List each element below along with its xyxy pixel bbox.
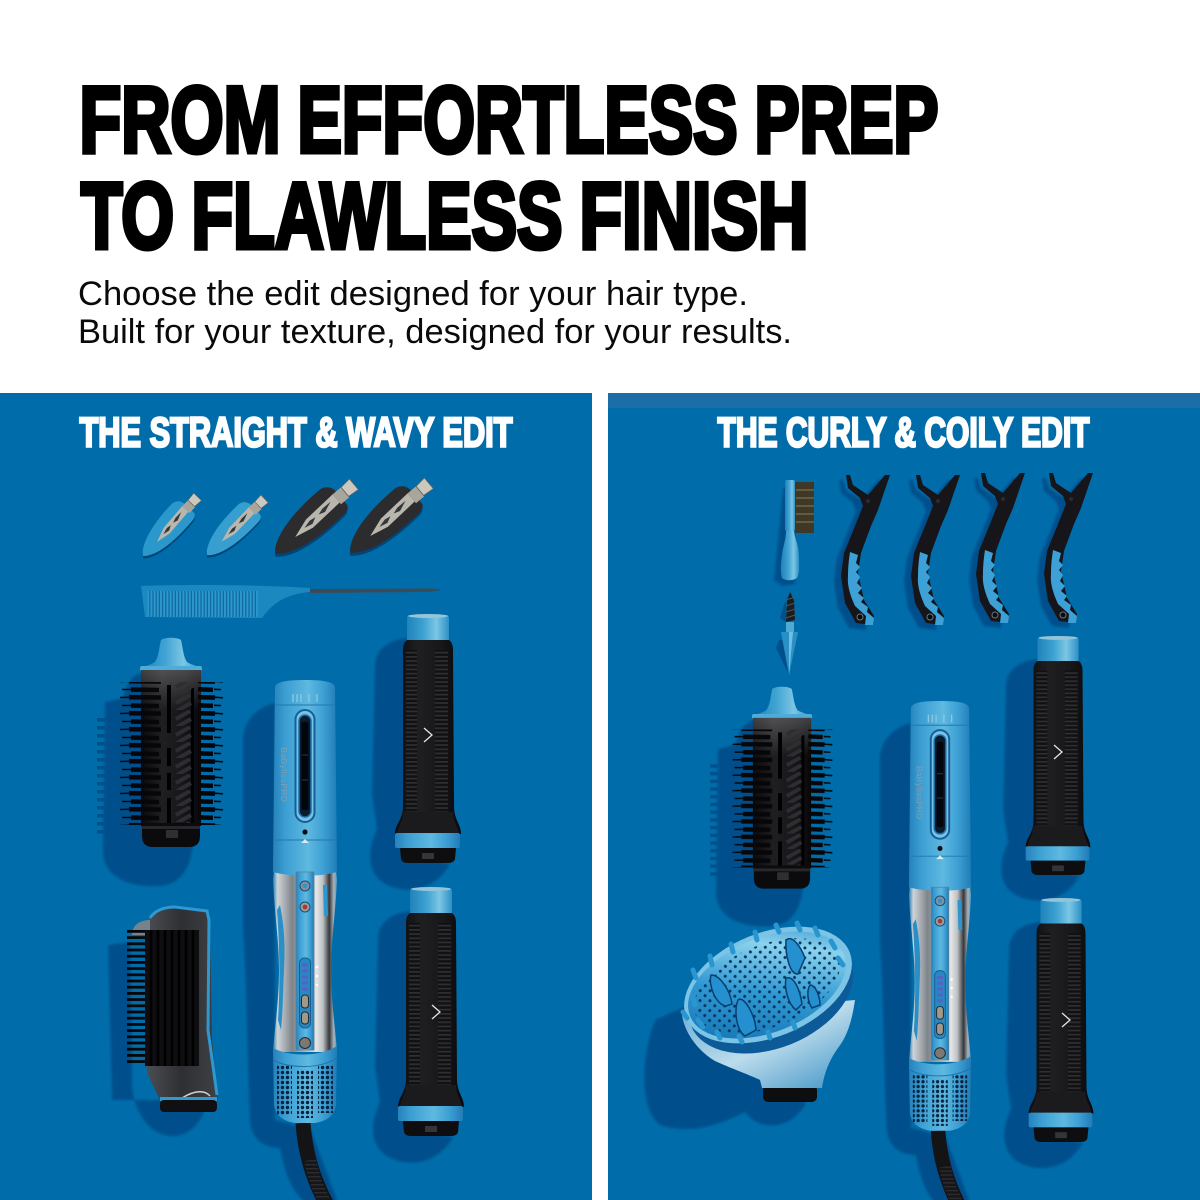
barrel attachment 1 <box>370 614 461 890</box>
icon: chevron <box>424 728 432 742</box>
title: EFFORTLESS <box>298 67 738 172</box>
icon: rat-tail comb <box>141 585 443 618</box>
subtitle <box>78 275 792 351</box>
icon: blue clip 2 <box>195 489 275 566</box>
round brush attachment <box>97 638 223 886</box>
paddle brush attachment <box>108 907 218 1136</box>
panel: straight and wavy edit <box>0 393 592 1200</box>
title <box>80 67 938 268</box>
title: TO <box>81 163 174 268</box>
icon: chevron <box>1054 745 1062 759</box>
title: FROM <box>80 67 280 172</box>
barrel attachment 3 <box>1001 636 1090 901</box>
subtitle: Choose the edit designed for your hair type. <box>78 275 748 313</box>
icon: spoolie tool <box>776 592 798 675</box>
icon: blue clip 1 <box>131 487 208 566</box>
icon: claw clip 2 <box>904 475 960 630</box>
round brush attachment <box>710 687 832 927</box>
diffuser prongs <box>710 939 820 1036</box>
icon: chevron <box>432 1005 440 1019</box>
title: PREP <box>754 67 938 172</box>
barrel attachment 2 <box>373 887 464 1163</box>
title: FINISH <box>580 163 808 268</box>
icon: black clip 1 <box>261 471 366 568</box>
main styler tool <box>880 701 973 1200</box>
barrel attachment 4 <box>1004 898 1093 1168</box>
icon: claw clip 4 <box>1037 473 1093 628</box>
icon: chevron <box>1062 1013 1070 1027</box>
title: FLAWLESS <box>192 163 562 268</box>
main styler tool <box>243 680 339 1200</box>
icon: edge brush <box>774 480 814 586</box>
diffuser attachment <box>644 904 871 1129</box>
diffuser rim nubs <box>683 923 843 1042</box>
panel heading: straight and wavy: THE STRAIGHT & WAVY EDIT <box>80 408 513 456</box>
panel: curly and coily edit <box>608 393 1200 1200</box>
icon: claw clip 3 <box>969 473 1025 628</box>
subtitle: Built for your texture, designed for your results. <box>78 313 792 351</box>
icon: claw clip 1 <box>834 475 890 630</box>
icon: black clip 2 <box>336 470 441 567</box>
